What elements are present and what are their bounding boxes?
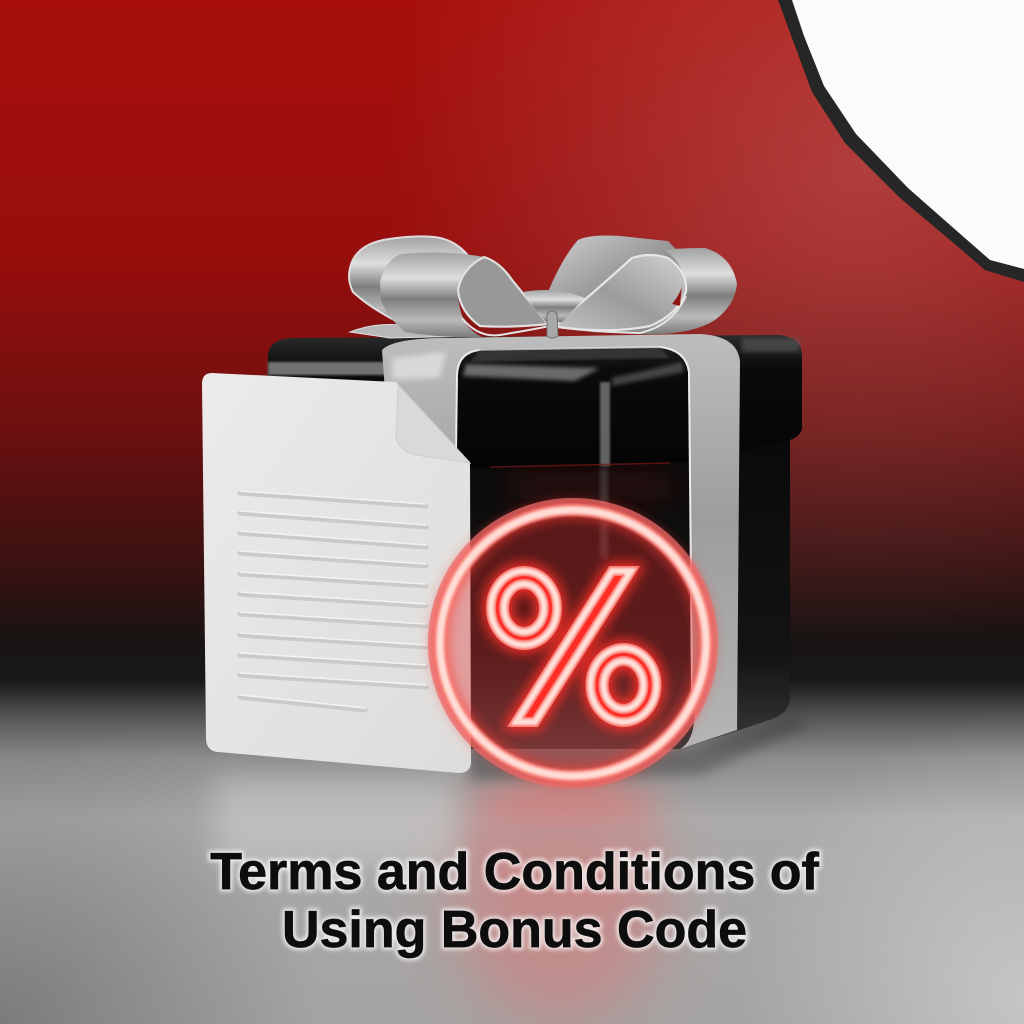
lid [268,335,802,468]
ring glow [440,510,706,776]
bow centre fold [523,290,585,322]
bow left inner loop [458,257,548,327]
percent glow [491,571,656,722]
page [202,373,471,773]
title text: Terms and Conditions of [210,843,819,901]
bow left front band [380,253,484,337]
percent symbol [491,571,656,722]
ribbon sheen [392,352,446,380]
bow knot [547,311,558,338]
gift box [268,236,802,749]
bow back right loop [548,236,688,320]
document [202,373,471,773]
bow back left loop [349,236,470,328]
percent tubes [491,571,656,722]
lid side highlights [268,338,800,375]
title halo [210,843,819,959]
box body [470,438,790,749]
bow right inner loop [558,255,686,330]
percent core [491,571,656,722]
title halo: Terms and Conditions of [210,843,819,901]
ribbon tail [350,324,470,338]
ribbon edge [456,347,692,690]
title halo: Using Bonus Code [282,901,747,959]
body reflections [510,468,670,558]
title text [210,843,819,959]
red gap in bow [672,283,682,306]
lid gloss [463,348,684,467]
disc rim [434,504,712,782]
ring core [440,510,706,776]
floor reflection: neon badge [455,786,665,1020]
title [210,843,819,959]
bow right outer band [590,248,737,334]
ribbon [382,334,740,749]
neon percent badge [428,498,718,788]
ring tube [440,510,706,776]
softbox light [778,0,1024,282]
glass disc [428,498,718,788]
text lines [240,493,426,710]
line highlights [240,491,426,708]
bow lower edge [462,296,686,335]
floor reflection: document [215,775,460,865]
page fold [396,385,470,463]
title text: Using Bonus Code [282,901,747,959]
floor shadow of box [470,716,810,780]
